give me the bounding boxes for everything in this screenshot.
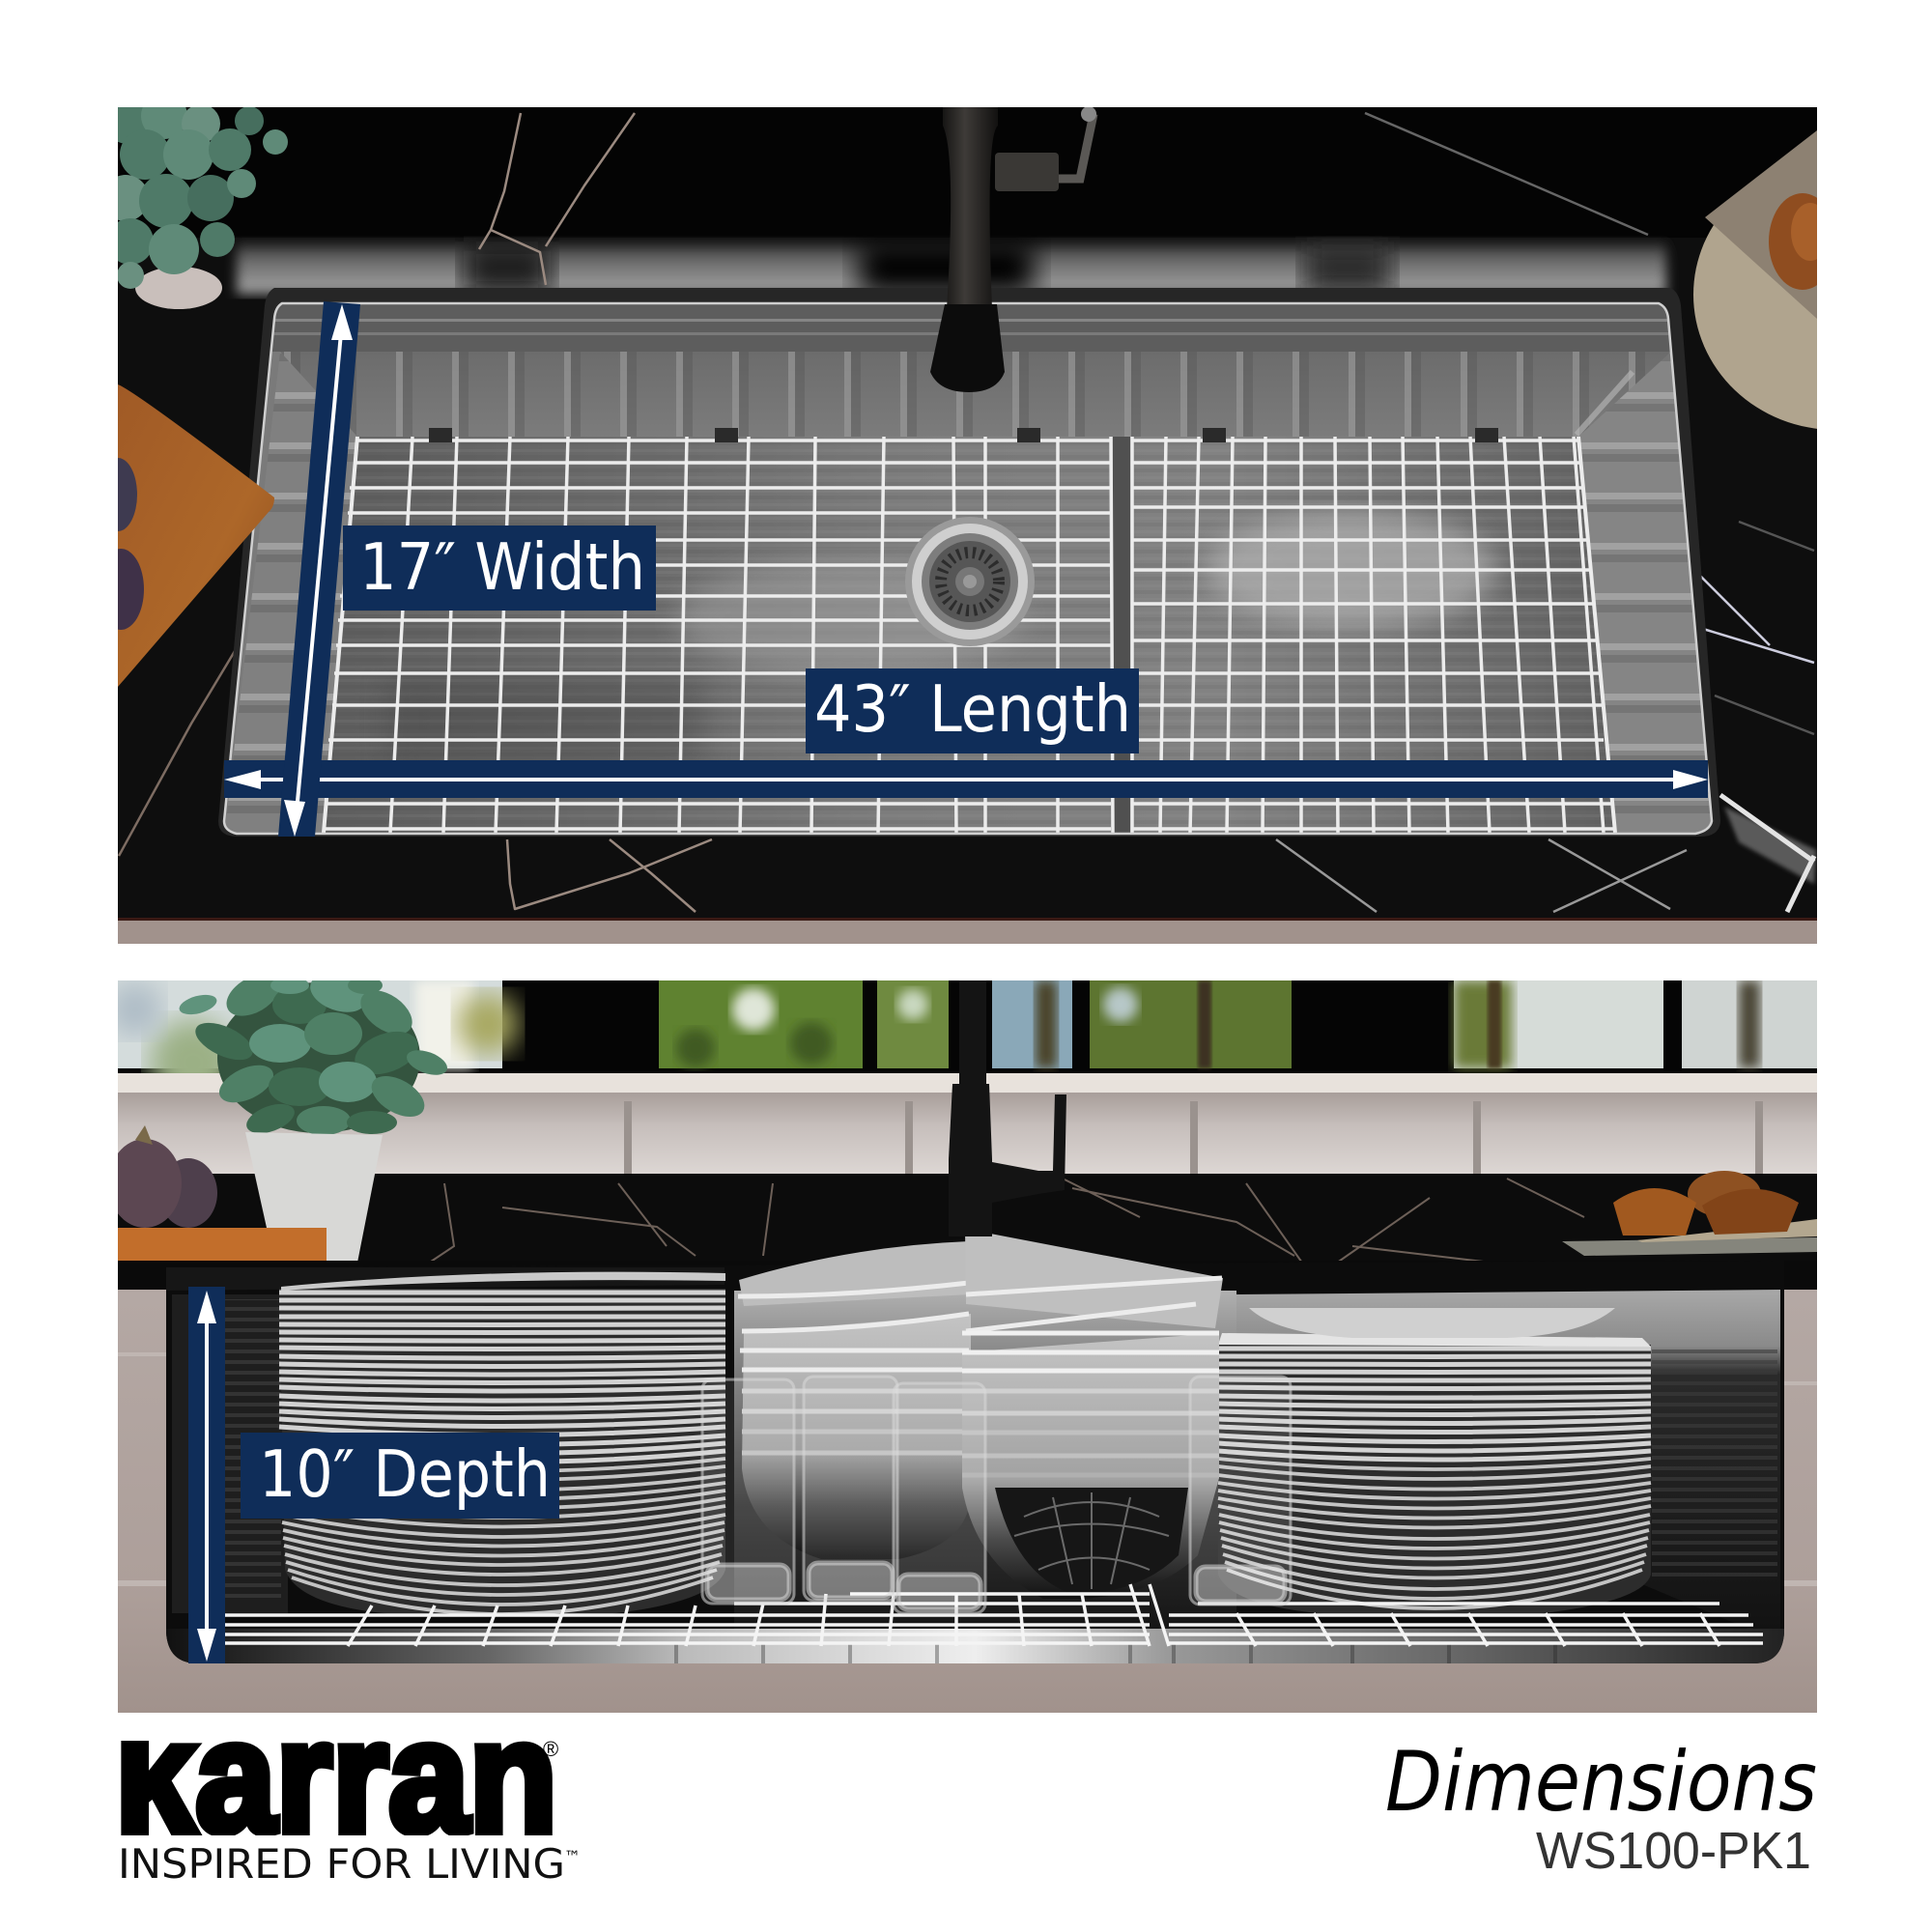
panel: top view of sink bbox=[98, 93, 1932, 944]
upper plate stripes bbox=[279, 1293, 725, 1463]
icon: figs bbox=[108, 1125, 217, 1228]
icon: muffins on tray bbox=[1562, 1171, 1817, 1256]
tagline: ™ bbox=[564, 1848, 581, 1867]
bowl stack left bbox=[738, 1241, 971, 1559]
counter edge bbox=[274, 1261, 1495, 1266]
sink bright lip bbox=[224, 303, 1712, 834]
width arrow bottom bbox=[284, 800, 305, 837]
model number: WS100-PK1 bbox=[1536, 1822, 1811, 1880]
plate stack left bbox=[279, 1272, 725, 1615]
window sill bbox=[118, 1073, 1817, 1093]
icon: plant with pot bbox=[177, 965, 450, 1263]
left interior wall bbox=[166, 1267, 724, 1613]
sink rim bbox=[218, 288, 1720, 837]
title: Dimensions: Dimensions bbox=[1385, 1734, 1817, 1831]
icon: faucet front view bbox=[949, 980, 1066, 1236]
sink floor highlight bbox=[166, 1629, 1784, 1663]
sink ledge bbox=[213, 303, 1729, 352]
sink right wall bbox=[1577, 352, 1719, 837]
sink left wall bbox=[224, 352, 357, 837]
sink cutaway body bbox=[166, 1261, 1784, 1663]
wire grid rack bbox=[324, 437, 1615, 833]
registered mark: ® bbox=[543, 1737, 558, 1761]
depth dimension bar bbox=[188, 1287, 225, 1663]
tile wall bbox=[118, 1093, 1817, 1175]
icon: eucalyptus plant bbox=[118, 107, 288, 309]
length arrow left bbox=[224, 770, 261, 789]
icon: faucet top view bbox=[930, 106, 1096, 392]
top plate rim bbox=[281, 1272, 725, 1291]
length arrow right bbox=[1673, 770, 1708, 789]
top single plate bbox=[1249, 1308, 1615, 1338]
marble veins bbox=[119, 113, 1816, 912]
bowl stack right bbox=[962, 1229, 1223, 1599]
length label: 43″ Length bbox=[814, 671, 1131, 747]
back wall bbox=[734, 1291, 1236, 1648]
width dimension bar bbox=[278, 301, 360, 837]
icon: drain bbox=[905, 517, 1035, 646]
right interior wall bbox=[1236, 1290, 1780, 1642]
panel: front cutaway view of sink bbox=[108, 965, 1817, 1713]
wire rack front bbox=[225, 1584, 1763, 1646]
lower plate stripes bbox=[280, 1459, 725, 1614]
sink basin bbox=[213, 299, 1729, 840]
tagline: INSPIRED FOR LIVING bbox=[118, 1840, 565, 1888]
sink back wall bbox=[280, 352, 1671, 439]
icon: wooden board bbox=[118, 1228, 327, 1261]
depth arrow top bbox=[197, 1291, 216, 1323]
glasses bbox=[702, 1377, 1291, 1613]
lower plate stripes bbox=[1218, 1459, 1651, 1608]
countertop: black marble bbox=[118, 107, 1817, 944]
top rim bbox=[1218, 1333, 1651, 1347]
marble backsplash bbox=[118, 1174, 1817, 1261]
icon: plate with napkin and muffin bbox=[1693, 130, 1817, 429]
window backdrop bbox=[108, 980, 1817, 1106]
logo: Karran: karran bbox=[115, 1688, 557, 1865]
depth arrow bottom bbox=[197, 1629, 216, 1662]
width arrow top bbox=[331, 304, 353, 340]
upper plate stripes bbox=[1218, 1349, 1651, 1460]
cabinet panels bbox=[118, 1290, 1817, 1713]
icon: cutting board with figs bbox=[118, 384, 274, 687]
rack clips bbox=[429, 428, 1498, 442]
length dimension bar bbox=[224, 760, 1708, 798]
sink floor bbox=[324, 437, 1615, 837]
plate stack right bbox=[1218, 1308, 1651, 1615]
depth label: 10″ Depth bbox=[259, 1436, 551, 1512]
width label: 17″ Width bbox=[359, 529, 645, 605]
